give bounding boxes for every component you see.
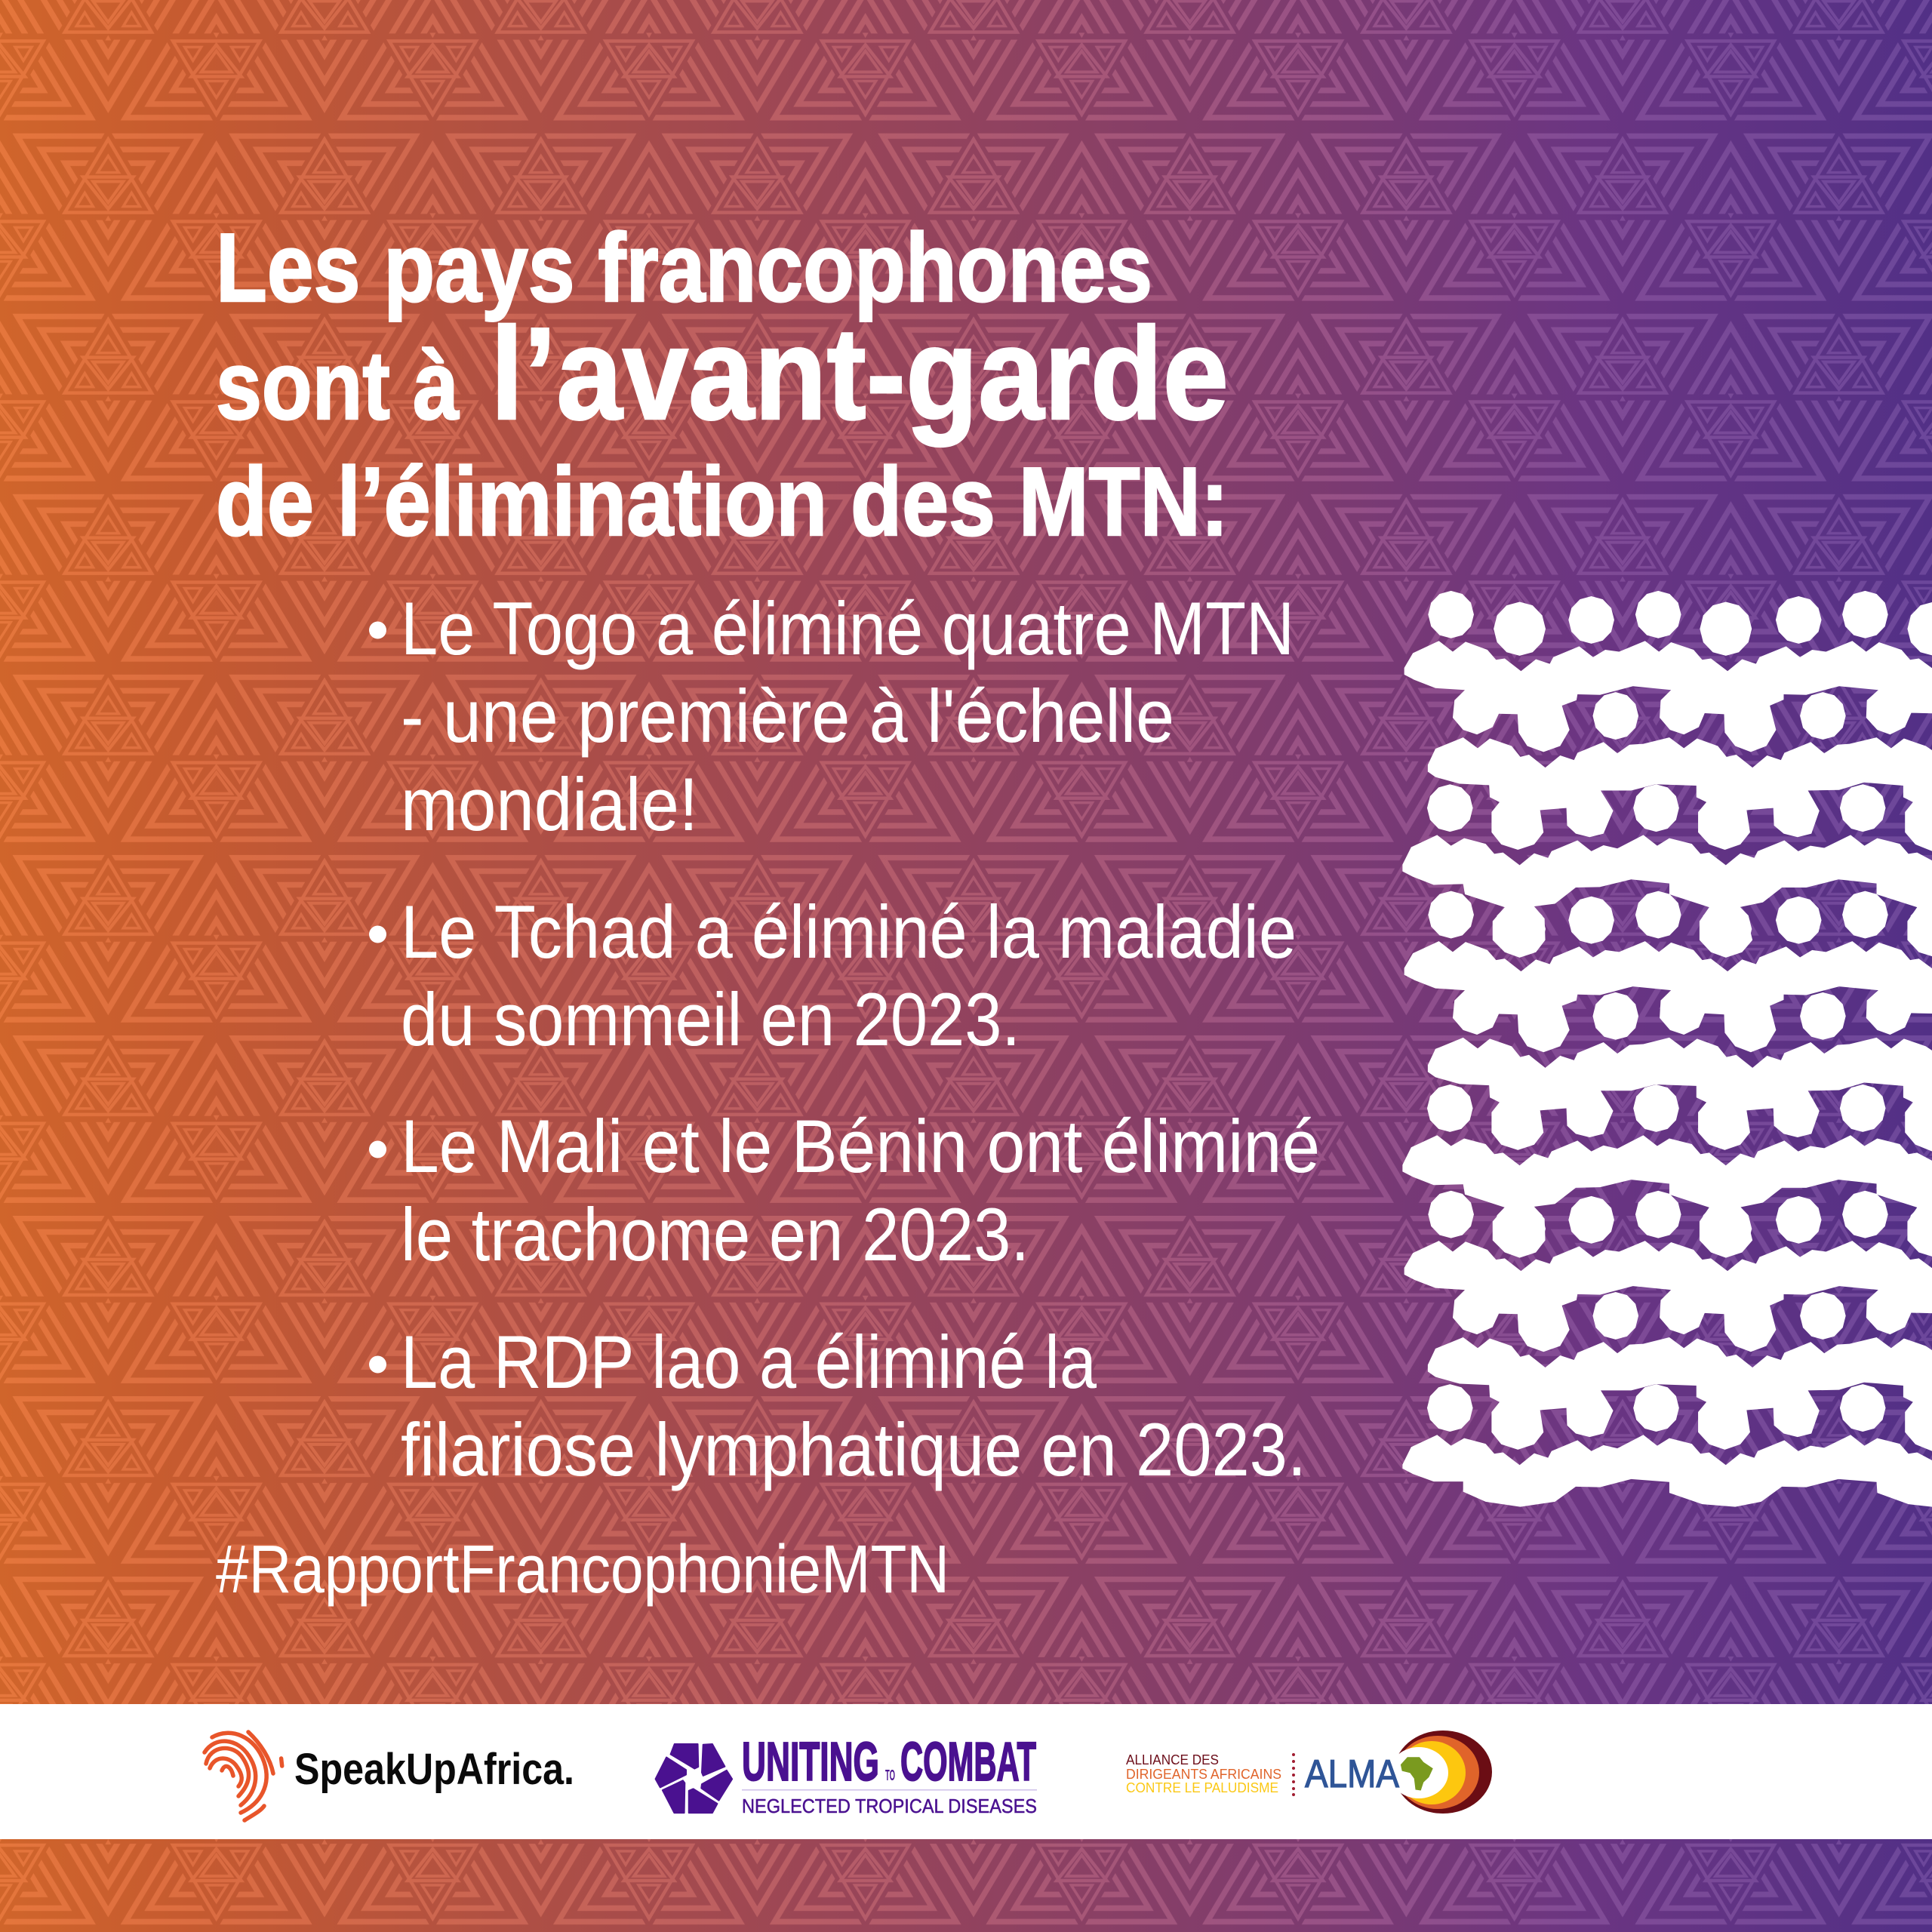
bullet: RDP lao: La RDP lao a éliminé la (401, 1320, 1097, 1404)
bullet: Togo: - une première à l'échelle (401, 674, 1174, 758)
bullet: Tchad (369, 890, 1297, 1061)
white logo band (0, 1704, 1932, 1839)
people pattern (1402, 591, 1932, 1507)
bullet: Mali et Bénin: le trachome en 2023. (401, 1192, 1029, 1276)
ALMA text lines: CONTRE LE PALUDISME (1126, 1780, 1278, 1795)
wordmark top: UNITING (742, 1732, 879, 1792)
bullet: Mali et Bénin: Le Mali et le Bénin ont éliminé (401, 1104, 1320, 1188)
ALMA wordmark: ALMA (1305, 1752, 1399, 1796)
ALMA text lines (1126, 1752, 1281, 1795)
dotted separator (1292, 1753, 1295, 1796)
bullet: Togo: mondiale! (401, 762, 698, 846)
ALMA text lines: ALLIANCE DES (1126, 1752, 1219, 1767)
icon: segmented hexagon (656, 1744, 732, 1813)
wordmark top: TO (885, 1767, 895, 1784)
hashtag: #RapportFrancophonieMTN (216, 1532, 949, 1607)
bullet: Tchad: du sommeil en 2023. (401, 977, 1020, 1061)
logo: Speak Up Africa (205, 1732, 574, 1820)
title line 2 small: sont à (216, 331, 460, 440)
bullet: Togo: Le Togo a éliminé quatre MTN (401, 586, 1294, 670)
bullet: Togo (369, 586, 1294, 846)
title line 2 large: l’avant-garde (491, 300, 1229, 447)
bullet: Mali et Bénin (369, 1104, 1320, 1276)
logo: ALMA (1126, 1730, 1492, 1814)
wordmark bottom: NEGLECTED TROPICAL DISEASES (742, 1795, 1037, 1817)
bullet: RDP lao: filariose lymphatique en 2023. (401, 1407, 1306, 1491)
bullet: Tchad: Le Tchad a éliminé la maladie (401, 890, 1297, 974)
title (216, 214, 1229, 556)
wordmark top: COMBAT (900, 1732, 1036, 1792)
title line 3: de l’élimination des MTN: (216, 448, 1229, 556)
icon: fingerprint Africa (205, 1732, 282, 1820)
ALMA text lines: DIRIGEANTS AFRICAINS (1126, 1767, 1281, 1782)
bullet list (369, 586, 1320, 1491)
bullet: RDP lao (369, 1320, 1306, 1491)
title line 1: Les pays francophones (216, 214, 1152, 322)
icon: ALMA sun and Africa (1389, 1730, 1492, 1814)
logo: Uniting to Combat NTDs (656, 1732, 1037, 1817)
wordmark: SpeakUpAfrica. (294, 1745, 574, 1794)
